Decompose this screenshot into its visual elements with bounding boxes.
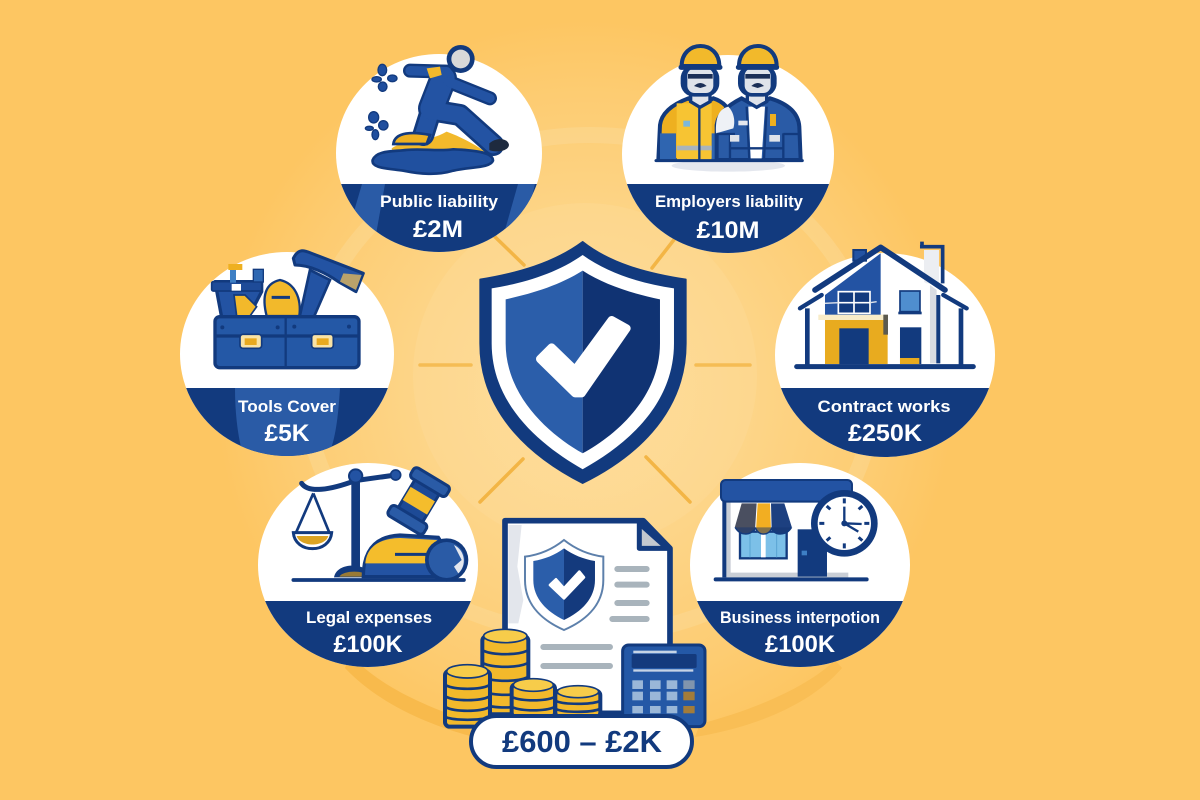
- icon: policy document: [505, 521, 670, 713]
- icon: calculator: [623, 645, 705, 727]
- cost pill: £600 – £2K: [502, 724, 663, 759]
- label: Tools Cover: [238, 398, 337, 416]
- value: £5K: [264, 420, 310, 447]
- panel: contract works: [770, 242, 1000, 463]
- panel: legal expenses: [255, 463, 485, 676]
- label: Business interpotion: [720, 609, 880, 627]
- label: Employers liability: [655, 193, 804, 211]
- panel: employers liability: [620, 46, 840, 259]
- icon: shop and clock: [716, 480, 878, 579]
- value: £10M: [696, 217, 760, 244]
- panel: tools cover: [175, 251, 400, 463]
- cost pill: [471, 716, 692, 767]
- icon: scales and gavel: [293, 466, 468, 582]
- icon: person slipping on a puddle: [365, 45, 509, 174]
- panel: business interruption: [685, 463, 915, 676]
- label: Contract works: [818, 398, 950, 416]
- panel: public liability: [330, 45, 550, 259]
- icon: central shield with check mark: [480, 242, 686, 483]
- panel: premium document, coins and calculator: [445, 521, 705, 767]
- icon: house under construction: [797, 242, 973, 367]
- icon: coin stacks: [445, 629, 600, 727]
- value: £2M: [413, 216, 463, 243]
- label: Legal expenses: [306, 609, 432, 627]
- icon: toolbox with hammer: [212, 251, 363, 368]
- icon: two construction workers: [656, 46, 802, 172]
- label: Public liability: [380, 193, 499, 211]
- value: £250K: [848, 420, 923, 447]
- value: £100K: [765, 631, 836, 658]
- value: £100K: [334, 631, 403, 658]
